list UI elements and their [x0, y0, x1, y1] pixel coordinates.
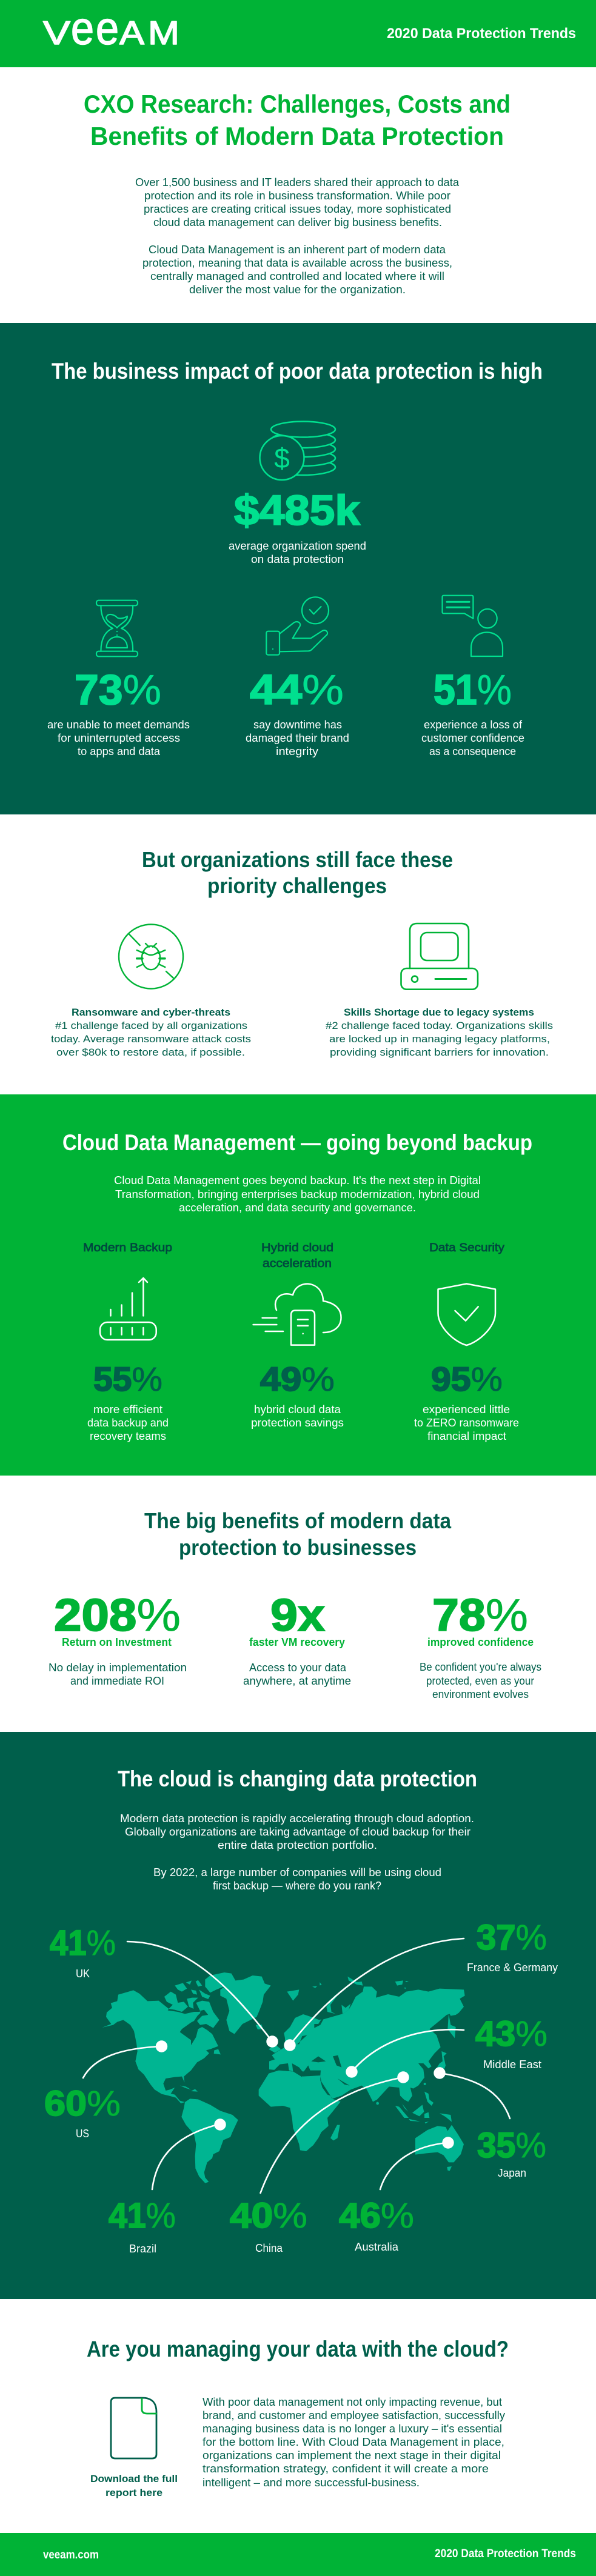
stat: 44%: damaged their brand — [246, 732, 349, 744]
description: Globally organizations are taking advantage of cloud backup for their — [125, 1826, 470, 1838]
challenge: skills shortage: providing significant barriers for innovation. — [330, 1047, 549, 1058]
stat: France and Germany — [467, 1918, 558, 1974]
logo: M — [148, 14, 179, 52]
stat: Australia: Australia — [355, 2241, 399, 2253]
intro text: practices are creating critical issues today, more sophisticated — [144, 203, 451, 215]
stat: 55%: data backup and — [87, 1417, 169, 1429]
stat: US: 60% — [44, 2084, 121, 2123]
footer band — [0, 2533, 596, 2576]
description — [114, 1174, 481, 1214]
logo — [43, 3, 179, 55]
header band — [0, 0, 596, 67]
stat: 55%: recovery teams — [90, 1430, 166, 1442]
panel: cloud is changing data protection — [0, 1732, 596, 2299]
stat: Australia — [339, 2196, 414, 2253]
icon: legacy computer — [401, 924, 478, 990]
download label — [90, 2473, 178, 2498]
icon: coin stack — [259, 422, 335, 480]
stat: 78% — [420, 1589, 541, 1700]
stat: 44%: 44% — [250, 666, 344, 713]
stat: 208%: and immediate ROI — [70, 1675, 164, 1687]
stat: 9x: 9x — [270, 1589, 325, 1640]
stat: 208%: 208% — [54, 1589, 181, 1640]
stat: 51%: customer confidence — [421, 732, 524, 744]
heading: priority challenges — [207, 873, 387, 898]
description: entire data protection portfolio. — [218, 1839, 377, 1851]
intro text: centrally managed and controlled and located where it will — [150, 270, 444, 282]
heading: But organizations still face these — [142, 847, 453, 872]
heading: The cloud is changing data protection — [118, 1766, 477, 1791]
logo: V — [43, 14, 70, 52]
stat: spend: $485k — [234, 487, 360, 534]
challenge: skills shortage: #2 challenge faced today. Organizations skills — [326, 1020, 553, 1031]
description: Modern data protection is rapidly accelerating through cloud adoption. — [120, 1812, 474, 1825]
world map — [102, 1972, 465, 2183]
download label: report here — [105, 2487, 162, 2498]
title — [84, 90, 511, 150]
stat: UK — [50, 1923, 116, 1980]
stat: UK: UK — [76, 1968, 90, 1980]
stat: France and Germany: 37% — [477, 1918, 547, 1957]
stat: 95%: 95% — [431, 1360, 503, 1398]
description: first backup — where do you rank? — [213, 1880, 381, 1892]
closing paragraph — [203, 2396, 505, 2489]
stat: Middle East — [475, 2014, 547, 2071]
intro text: Cloud Data Management is an inherent part of modern data — [149, 244, 446, 256]
stat: Brazil: 41% — [109, 2196, 176, 2235]
stat: 78%: 78% — [432, 1589, 528, 1640]
icon: hourglass — [96, 601, 138, 656]
stat: Japan: 35% — [477, 2126, 546, 2165]
stat: 55% — [87, 1360, 169, 1442]
stat: UK: 41% — [50, 1923, 116, 1963]
stat: Brazil: Brazil — [129, 2243, 156, 2255]
stat: China: China — [255, 2242, 283, 2254]
icon: cloud and server — [253, 1284, 341, 1345]
stat: 44% — [246, 666, 349, 757]
stat: 95%: financial impact — [427, 1430, 506, 1442]
stat: 9x: faster VM recovery — [249, 1636, 345, 1648]
stat: 78%: improved confidence — [427, 1636, 534, 1648]
description: Cloud Data Management goes beyond backup. It's the next step in Digital — [114, 1174, 481, 1186]
stat: 73%: for uninterrupted access — [58, 732, 180, 744]
stat: 73%: 73% — [75, 666, 161, 713]
icon: document — [111, 2398, 156, 2458]
closing paragraph: intelligent – and more successful-business. — [203, 2477, 420, 2489]
logo: A — [119, 14, 144, 52]
stat: 9x: anywhere, at anytime — [243, 1675, 351, 1687]
stat: US: US — [76, 2128, 89, 2140]
stat: 49%: hybrid cloud data — [254, 1403, 341, 1416]
stat: 95% — [414, 1360, 519, 1442]
stat: 73% — [47, 666, 190, 757]
description: acceleration, and data security and governance. — [179, 1202, 416, 1214]
stat: 208%: Return on Investment — [62, 1636, 172, 1648]
column headings: Modern Backup — [83, 1242, 172, 1254]
panel: business impact — [0, 323, 596, 814]
challenge: skills shortage — [326, 1007, 553, 1058]
column headings: Hybrid cloud — [261, 1242, 333, 1254]
intro text: protection, meaning that data is available across the business, — [142, 257, 452, 269]
heading: protection to businesses — [179, 1535, 417, 1560]
challenge: ransomware: over $80k to restore data, if possible. — [56, 1047, 245, 1058]
stat: 95%: to ZERO ransomware — [414, 1417, 519, 1429]
stat: 51% — [421, 666, 524, 757]
panel: cloud data management — [0, 1094, 596, 1476]
icon: coin stack: $ — [274, 442, 290, 474]
heading: Cloud Data Management — going beyond backup — [62, 1130, 532, 1155]
intro text: deliver the most value for the organization. — [189, 284, 406, 296]
closing paragraph: organizations can implement the next stage in their digital — [203, 2449, 501, 2461]
stat: 73%: are unable to meet demands — [47, 719, 190, 731]
footer label: 2020 Data Protection Trends — [435, 2548, 576, 2560]
footer url: veeam.com — [43, 2549, 99, 2561]
stat: 44%: integrity — [276, 745, 318, 757]
stat: 55%: more efficient — [93, 1403, 162, 1416]
header label: 2020 Data Protection Trends — [387, 25, 576, 42]
stat: 49%: protection savings — [251, 1417, 344, 1429]
panel: call to action — [87, 2337, 509, 2498]
heading: Are you managing your data with the cloud? — [87, 2337, 509, 2361]
stat: China: 40% — [230, 2196, 307, 2235]
stat: 9x — [243, 1589, 351, 1687]
stat: spend: on data protection — [251, 553, 344, 565]
stat: 51%: experience a loss of — [424, 719, 523, 731]
stat: Australia: 46% — [339, 2196, 414, 2235]
closing paragraph: brand, and customer and employee satisfaction, successfully — [203, 2409, 505, 2421]
heading: The business impact of poor data protection is high — [52, 359, 543, 384]
stat: spend — [229, 487, 366, 565]
closing paragraph: With poor data management not only impacting revenue, but — [203, 2396, 502, 2408]
location pins — [156, 2035, 454, 2149]
stat: 9x: Access to your data — [249, 1662, 347, 1674]
stat: Middle East: Middle East — [483, 2058, 541, 2071]
title: Benefits of Modern Data Protection — [90, 122, 504, 150]
stat: 49% — [251, 1360, 344, 1429]
connector curves — [83, 1939, 510, 2193]
stat: 51%: as a consequence — [429, 745, 516, 757]
icon: hand with check — [266, 597, 329, 655]
closing paragraph: managing business data is no longer a luxury – it's essential — [203, 2423, 502, 2435]
intro text: cloud data management can deliver big business benefits. — [153, 216, 442, 228]
panel: priority challenges — [51, 847, 553, 1058]
stat: Japan: Japan — [498, 2167, 526, 2179]
icon: backup device with rising bars — [100, 1278, 156, 1340]
stat: 51%: 51% — [434, 666, 512, 713]
stat: 78%: environment evolves — [432, 1688, 529, 1700]
stat: France and Germany: France & Germany — [467, 1962, 558, 1974]
description — [120, 1812, 474, 1892]
stat: China — [230, 2196, 307, 2254]
stat: Brazil — [109, 2196, 176, 2255]
closing paragraph: for the bottom line. With Cloud Data Management in place, — [203, 2436, 504, 2448]
icon: shield with check — [438, 1283, 495, 1345]
stat: 73%: to apps and data — [78, 745, 161, 757]
heading — [144, 1508, 452, 1560]
challenge: ransomware: today. Average ransomware attack costs — [51, 1033, 251, 1045]
challenge: ransomware — [51, 1007, 251, 1058]
challenge: skills shortage: Skills Shortage due to legacy systems — [344, 1007, 534, 1018]
description: Transformation, bringing enterprises backup modernization, hybrid cloud — [115, 1188, 480, 1200]
column headings — [83, 1242, 505, 1270]
stat: 95%: experienced little — [423, 1403, 510, 1416]
intro text: protection and its role in business transformation. While poor — [144, 190, 450, 202]
icon: crossed-out bug — [119, 925, 183, 989]
closing paragraph: transformation strategy, confident it will create a more — [203, 2463, 489, 2475]
icon: person with speech bubble — [443, 596, 503, 656]
heading — [142, 847, 453, 898]
stat: US — [44, 2084, 121, 2140]
stat: 78%: Be confident you're always — [420, 1661, 541, 1673]
stat: 208%: No delay in implementation — [49, 1662, 187, 1674]
logo: e — [71, 3, 94, 55]
logo: e — [96, 3, 119, 55]
stat: Middle East: 43% — [475, 2014, 547, 2054]
challenge: ransomware: Ransomware and cyber-threats — [72, 1007, 230, 1018]
download label: Download the full — [90, 2473, 178, 2484]
challenge: ransomware: #1 challenge faced by all organizations — [55, 1020, 247, 1031]
stat: spend: average organization spend — [229, 540, 366, 552]
heading: The big benefits of modern data — [144, 1508, 452, 1533]
stat: 208% — [49, 1589, 187, 1687]
title: CXO Research: Challenges, Costs and — [84, 90, 511, 118]
panel: benefits — [49, 1508, 541, 1700]
challenge: skills shortage: are locked up in managing legacy platforms, — [329, 1033, 550, 1045]
stat: 49%: 49% — [260, 1360, 335, 1398]
intro text: Over 1,500 business and IT leaders shared their approach to data — [135, 176, 460, 188]
description: By 2022, a large number of companies will be using cloud — [153, 1866, 441, 1879]
stat: 55%: 55% — [93, 1360, 162, 1398]
column headings: Data Security — [429, 1242, 505, 1254]
intro text — [135, 176, 460, 296]
stat: 78%: protected, even as your — [426, 1675, 534, 1687]
stat: 44%: say downtime has — [253, 719, 342, 731]
column headings: acceleration — [263, 1257, 332, 1270]
